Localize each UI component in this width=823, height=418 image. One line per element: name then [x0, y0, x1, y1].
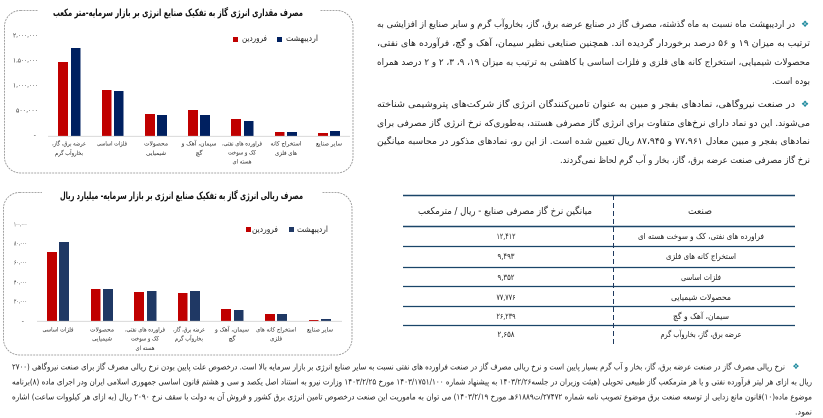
table: average gas rate by industry — [403, 195, 795, 344]
category labels: quantity: استخراج کانه — [270, 140, 302, 148]
category labels: rial: فلزات اساسی — [42, 326, 74, 334]
y axis labels: rial: ۸۰،۰۰۰ — [14, 240, 27, 248]
table rows: ۲,۶۵۸ — [498, 329, 515, 339]
bullet icon: ❖ — [801, 100, 809, 110]
table rows: سیمان، آهک و گچ — [673, 311, 729, 321]
y axis labels: rial: ۲۰،۰۰۰ — [14, 298, 27, 306]
text block: second paragraph: در صنعت نیروگاهی، نمادهای بفجر و مبین به عنوان تامین‌کنندگان انرژی گاز شرکت‌های پتروشیمی شناخته — [377, 98, 795, 110]
bars: quantity — [48, 48, 350, 136]
table header — [418, 205, 712, 217]
table rows: ۱۲,۴۱۲ — [496, 231, 516, 241]
panel: rial gas consumption chart — [4, 187, 352, 355]
category labels: rial: کک و سوخت — [131, 336, 159, 342]
bullet icon: ❖ — [792, 362, 800, 371]
text block: second paragraph: نرخ گاز مصرفی صنعت عرضه برق، گاز، بخار و آب گرم لحاظ نمی‌گردند. — [560, 154, 810, 166]
y axis labels: rial: ۴۰،۰۰۰ — [14, 278, 27, 286]
table rows: ۹,۳۵۲ — [498, 272, 515, 282]
category labels: quantity: سیمان، آهک و — [181, 138, 216, 148]
text block: first paragraph: محصولات شیمیایی، استخراج کانه های فلزی و فلزات اساسی با کاهشی به ترتیب به میزان ۱۹، ۹، ۳، ۲ و ۲ درصد همراه — [377, 58, 810, 68]
category labels: rial: فلزی — [270, 336, 282, 342]
text block: first paragraph — [377, 18, 811, 87]
text block: first paragraph: ترتیب به میزان ۱۹ و ۵۶ درصد برخوردار گردیده اند. همچنین صنایعی نظیر سیمان، آهک و گچ، فرآورده های نفتی، — [377, 37, 811, 49]
y axis labels: quantity: ۲،۰۰۰،۰۰۰ — [13, 32, 38, 40]
category labels: quantity: بخاروآب گرم — [55, 148, 83, 157]
category labels: rial: عرضه برق، گاز، — [173, 326, 205, 334]
table rows: ۷۷,۷۷۶ — [496, 292, 516, 302]
y axis labels: rial: ۶۰،۰۰۰ — [14, 258, 27, 266]
legend: quantity: فروردین — [242, 34, 267, 44]
table rows: ۲۶,۲۳۹ — [496, 311, 516, 321]
legend: quantity — [233, 34, 318, 44]
table header: میانگین نرخ گاز مصرفی صنایع - ریال / مترمکعب — [418, 205, 592, 217]
category labels: quantity — [52, 138, 342, 166]
table rows: فلزات اساسی — [681, 272, 721, 282]
table rows — [496, 231, 764, 339]
footnote text — [12, 362, 812, 416]
category labels: rial: سیمان، آهک و — [214, 324, 249, 334]
bars: rial — [37, 242, 342, 321]
text block: second paragraph — [377, 98, 810, 166]
category labels: rial: استخراج کانه های — [256, 326, 296, 334]
table rows: محصولات شیمیایی — [671, 292, 731, 302]
category labels: rial: سایر صنایع — [307, 326, 333, 334]
table rows: استخراج کانه های فلزی — [666, 251, 736, 261]
footnote text: موضوع ماده(۱۰)قانون مانع زدایی از توسعه صنعت برق موضوع تصویب نامه شماره ۲۷۴۷۲/ت۶۱۸۸۹هـ مورخ ۱۴۰۳/۲/۱۹) می توان به ماموریت این صنعت درخصوص تامین انرژی برق کشور و فروش آن به دولت با سقف نرخ ۲۰۹۰ ریال (به ازای هر کیلووات ساعت) اشاره — [12, 392, 812, 402]
chart title: rial: مصرف ریالی انرژی گاز به تفکیک صنایع انرژی بر بازار سرمایه- میلیارد ریال — [60, 189, 303, 202]
category labels: quantity: سایر صنایع — [316, 140, 342, 148]
chart title: quantity: مصرف مقداری انرژی گاز به تفکیک صنایع انرژی بر بازار سرمایه-متر مکعب — [53, 6, 303, 19]
y axis labels: quantity: ۱،۵۰۰،۰۰۰ — [13, 56, 38, 64]
panel: quantity gas consumption chart — [4, 5, 353, 173]
text block: second paragraph: نمادهای بفجر و مبین معادل ۷۷،۹۶۱ و ۸۷،۹۴۵ ریال تعیین شده است. از این رو، نمادهای مذکور در محاسبه میانگین — [377, 135, 810, 147]
category labels: rial: بخاروآب گرم — [175, 334, 203, 342]
legend: rial: فروردین — [252, 225, 278, 235]
category labels: quantity: فلزات اساسی — [97, 140, 127, 148]
table rows: ۹,۴۹۳ — [498, 251, 515, 261]
y axis labels: rial: - — [22, 317, 25, 325]
table header: صنعت — [688, 206, 712, 217]
legend: rial: اردیبهشت — [297, 225, 328, 235]
category labels: quantity: عرضه برق، گاز، — [52, 140, 86, 148]
category labels: rial: محصولات — [90, 326, 114, 334]
category labels: quantity: محصولات — [144, 140, 168, 148]
legend: rial — [246, 225, 328, 235]
y axis labels: rial: ۱۰۰،۰۰۰ — [14, 220, 27, 228]
category labels: rial: هسته ای — [136, 345, 154, 352]
category labels: rial — [42, 324, 333, 352]
y axis labels: quantity: ۵۰۰،۰۰۰ — [16, 106, 38, 114]
category labels: rial: فراورده های نفتی، — [125, 326, 165, 334]
category labels: quantity: فراورده های نفتی، — [222, 140, 262, 148]
y axis labels: quantity — [13, 32, 38, 140]
category labels: quantity: کک و سوخت — [228, 150, 256, 156]
y axis labels: rial — [14, 220, 27, 325]
category labels: quantity: هسته ای — [232, 158, 252, 166]
legend: quantity: اردیبهشت — [286, 34, 318, 44]
category labels: rial: گچ — [228, 334, 236, 342]
bullet icon: ❖ — [801, 20, 809, 30]
y axis labels: quantity: - — [34, 132, 37, 140]
category labels: quantity: شیمیایی — [146, 150, 166, 157]
category labels: quantity: گچ — [196, 149, 203, 157]
table rows: عرضه برق، گاز، بخاروآب گرم — [660, 329, 742, 339]
category labels: rial: شیمیایی — [92, 336, 112, 342]
text block: second paragraph: می‌شوند. این دو نماد دارای نرخ‌های متفاوت برای انرژی گاز مصرفی هستند، به‌طوری‌که نرخ انرژی گاز مصرفی برای — [377, 117, 810, 129]
text block: first paragraph: بوده است. — [772, 77, 810, 87]
text block: first paragraph: در اردیبهشت ماه نسبت به ماه گذشته، مصرف گاز در صنایع عرضه برق، گاز، بخاروآب گرم و سایر صنایع از افزایشی به — [377, 18, 795, 30]
footnote text: نمود. — [795, 406, 812, 416]
table rows: فراورده های نفتی، کک و سوخت هسته ای — [638, 231, 764, 241]
category labels: quantity: های فلزی — [275, 150, 297, 157]
y axis labels: quantity: ۱،۰۰۰،۰۰۰ — [13, 82, 38, 90]
